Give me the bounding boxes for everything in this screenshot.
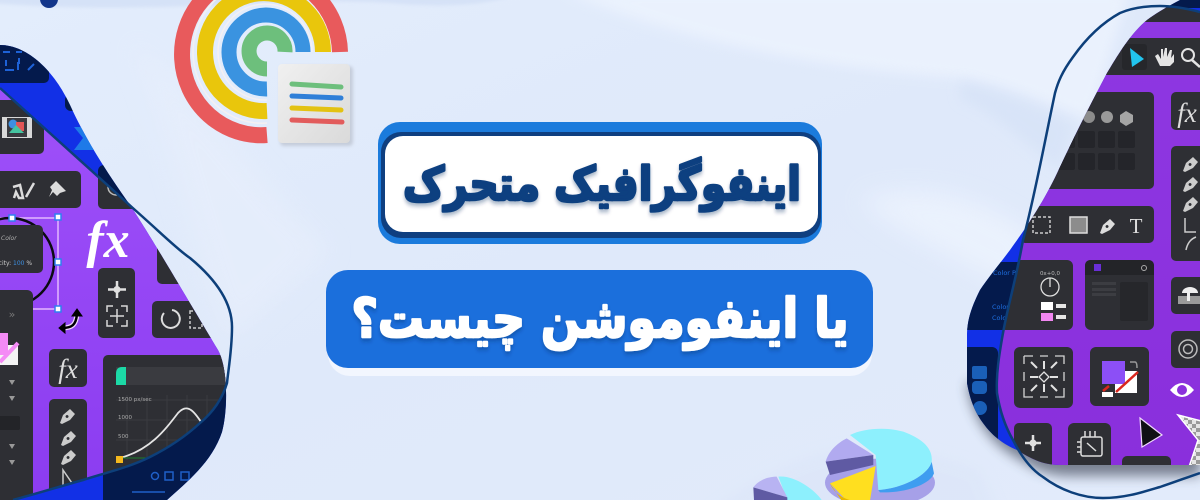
icon: large pie chart xyxy=(825,429,935,500)
icon: film strip xyxy=(2,117,32,138)
tile: tools xyxy=(0,171,81,208)
tile: side panel: » xyxy=(9,308,15,321)
panel: left tool collage xyxy=(0,40,243,500)
blue ring xyxy=(229,15,303,89)
tile: colour panel: Color xyxy=(1,235,17,242)
title white fill xyxy=(385,136,818,232)
icon: small pie chart xyxy=(747,477,822,500)
small pie purple top xyxy=(753,477,787,497)
tile: anchor grid xyxy=(1014,347,1073,408)
tile: toolbar xyxy=(1106,38,1200,75)
note card lines xyxy=(292,84,342,122)
icon: pin xyxy=(49,181,66,197)
tile: bottom xyxy=(1122,456,1171,476)
underlay navy tiles xyxy=(0,42,240,500)
right underlay text: Color B xyxy=(992,314,1016,322)
pie base plate xyxy=(825,459,935,500)
tile: pen tools xyxy=(49,399,87,488)
rotate arrow icon xyxy=(59,309,82,333)
underlay navy graph icons xyxy=(132,472,189,492)
heading: subtitle card xyxy=(326,270,873,376)
underlay hourglass icon xyxy=(74,127,94,150)
right underlay text xyxy=(992,270,1016,320)
green ring xyxy=(249,33,285,69)
tile: pen tools right xyxy=(1171,146,1200,261)
yellow ring xyxy=(205,0,323,111)
title dark border xyxy=(381,132,821,238)
tile: film xyxy=(0,100,44,154)
tile: rotate xyxy=(152,301,211,338)
chart: speed graph: 1500 px/sec xyxy=(118,397,152,403)
panel: right tool collage xyxy=(960,0,1200,498)
right blue underlay xyxy=(960,0,1200,470)
subtitle text: یا اینفوموشن چیست؟ xyxy=(351,286,849,351)
icon: eye xyxy=(1170,383,1194,397)
small pie purple side xyxy=(753,487,787,500)
pie cyan top xyxy=(850,429,932,490)
right underlay text: Color A xyxy=(992,303,1016,311)
tile: stage icon xyxy=(1171,277,1200,314)
fx large label: fx xyxy=(86,212,130,269)
tile: fx: fx xyxy=(58,354,78,384)
tile: fx right xyxy=(1171,92,1200,130)
title outer blue xyxy=(378,122,822,244)
selection handles xyxy=(9,214,61,312)
ring band light gaps xyxy=(193,0,331,123)
tile: drawing tools: T xyxy=(1130,214,1143,238)
underlay arrows xyxy=(3,52,34,70)
icon: ring chart with note card xyxy=(182,0,353,146)
icon: spiral xyxy=(107,186,118,196)
pie yellow slice xyxy=(830,466,876,500)
chart: speed graph: 500 xyxy=(118,434,129,440)
heading: title card xyxy=(378,122,822,244)
chart: speed graph xyxy=(103,355,226,473)
tile: spiral xyxy=(98,178,132,209)
tile: side panel xyxy=(0,290,33,500)
panel: right purple area xyxy=(998,8,1200,465)
tile: drawing tools xyxy=(1020,206,1154,243)
tile: colour phase xyxy=(1000,260,1073,330)
selection frame xyxy=(0,218,58,309)
right underlay tiles xyxy=(960,0,1200,457)
small pie cyan slice xyxy=(778,477,822,500)
tile: move right xyxy=(1014,423,1052,473)
pie blue side xyxy=(878,462,934,492)
tile: swap colours xyxy=(1090,347,1149,406)
tile: colour phase: 0x+0,0 xyxy=(1040,271,1061,277)
pie yellow edge xyxy=(830,483,852,500)
pie purple top xyxy=(826,438,873,462)
note card xyxy=(278,64,350,143)
tile: swatches xyxy=(1040,92,1154,189)
tile: small window xyxy=(1085,260,1154,330)
subtitle under glow xyxy=(328,290,872,376)
note card shadow xyxy=(280,66,353,146)
icon: black cursor xyxy=(1140,418,1162,447)
red ring xyxy=(182,0,340,135)
icon: brush figure xyxy=(13,183,34,198)
top dark bar xyxy=(1144,8,1200,22)
right underlay shapes xyxy=(972,366,987,415)
small pie base xyxy=(747,494,820,500)
title text: اینفوگرافیک متحرک xyxy=(403,157,801,212)
chart: speed graph: 1000 xyxy=(118,415,132,421)
left outline curve xyxy=(0,88,232,500)
tile: move tools xyxy=(98,268,135,338)
tile: spiral right xyxy=(1171,331,1200,368)
small navy dot xyxy=(40,0,58,8)
tile: upper right xyxy=(157,248,178,284)
right outline curve xyxy=(997,6,1200,498)
tile: fx right: fx xyxy=(1177,98,1197,128)
right blob shadow xyxy=(967,380,1200,476)
panel: purple area xyxy=(0,90,226,500)
tile: chip xyxy=(1068,423,1111,473)
pie purple side xyxy=(826,455,873,475)
icon: star checker xyxy=(1178,415,1200,470)
tile: colour panel xyxy=(0,225,43,273)
blue underlay xyxy=(0,40,240,500)
selection arc xyxy=(0,218,54,306)
tile: fx xyxy=(49,349,87,387)
right underlay text: Color Phase xyxy=(993,269,1031,277)
subtitle box xyxy=(326,270,873,368)
